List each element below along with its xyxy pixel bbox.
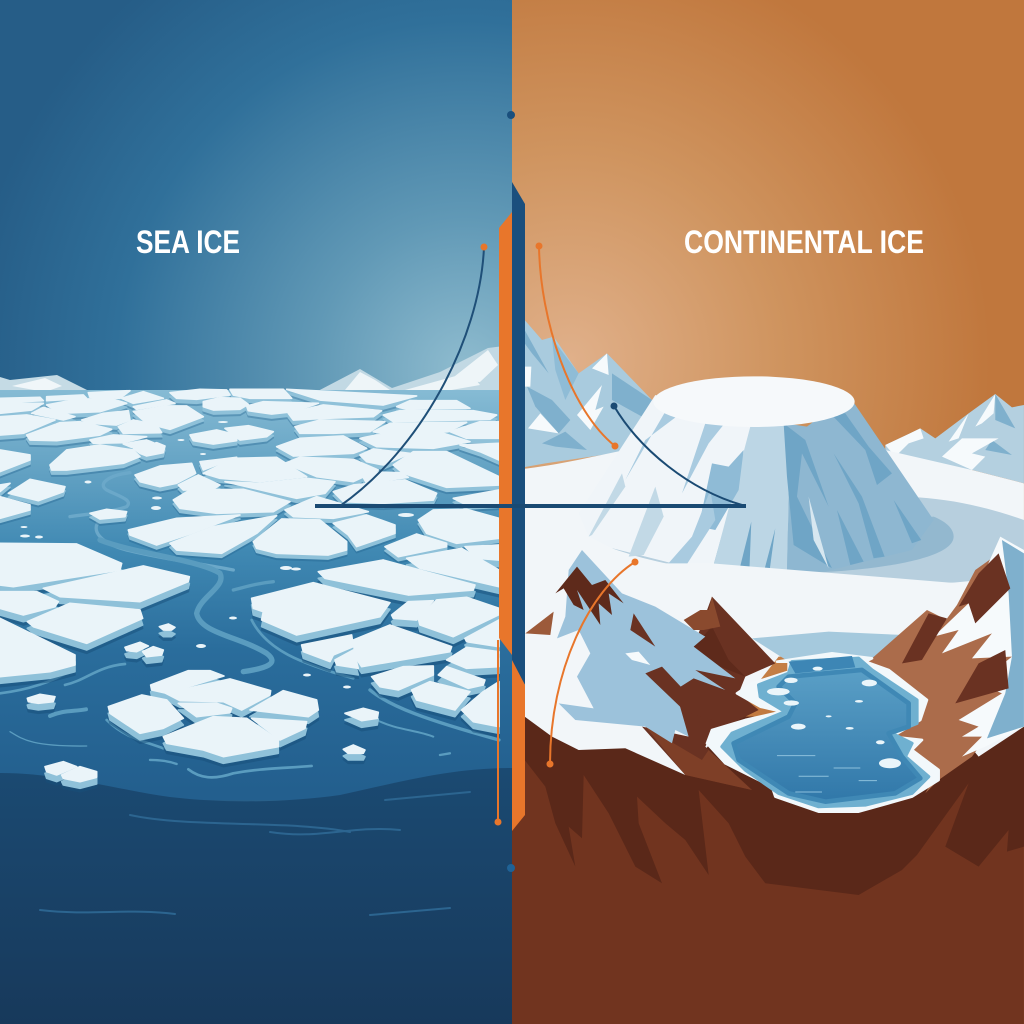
back left mountains [512,320,659,469]
right mountain ice [902,537,1024,757]
callout line: sea ice navy [340,244,488,506]
panel: sea ice [0,0,512,1024]
distant ice mountains [0,345,512,398]
right mountain rock [865,553,1024,793]
callout line: sea ice orange [494,640,502,826]
glacier wall [752,632,904,662]
plateau body [579,395,934,573]
sea ice title: SEA ICE [136,224,240,260]
left mountain ice [557,550,735,743]
base shadow [612,497,1024,584]
rock shadow [525,717,1024,895]
ground and mountains [512,537,1024,1024]
ice floes far [0,389,499,563]
snowfield [512,563,1024,775]
plateau top [653,376,855,427]
back mountains and plateau [512,320,1024,627]
glacial lake [707,653,939,812]
rock base [512,717,1024,1024]
back right mountains [885,394,1024,483]
horizontal connector [315,504,746,508]
center divider [499,111,525,872]
panel: continental ice [512,0,1024,1024]
deep water waves [40,792,470,915]
callout line: continental orange [536,242,618,450]
left mountain rock [632,597,775,790]
small ice pieces [20,421,414,688]
callout line: plateau navy [610,402,742,505]
ice floes near [0,543,499,792]
snow plain [512,450,1024,627]
continental ice title: CONTINENTAL ICE [684,224,924,260]
callout line: mountain orange [546,558,638,768]
sea [0,390,512,800]
water streams lower [0,540,499,777]
left mountain peak [525,567,720,720]
deep water [0,768,512,1024]
water streams upper [70,473,233,570]
